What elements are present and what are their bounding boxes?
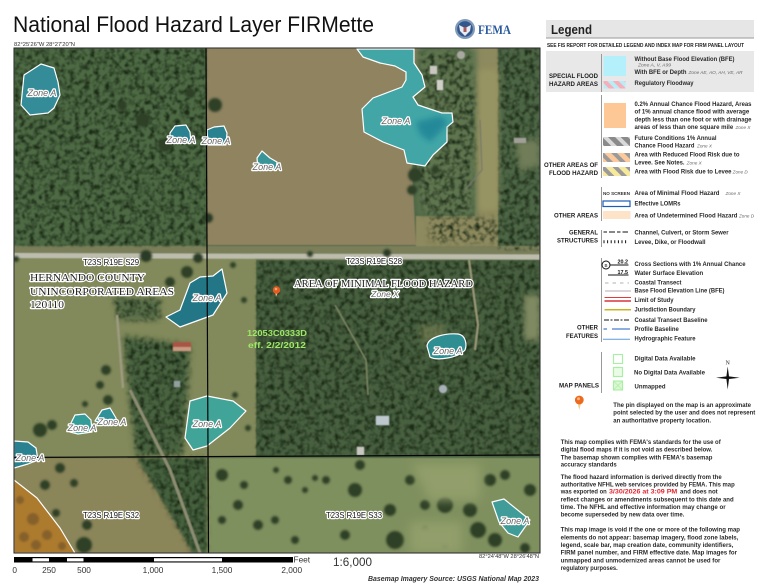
legend: other areas of flood hazard <box>544 95 752 178</box>
legend: special flood hazard areas: Without Base Flood Elevation (BFE) <box>634 57 734 63</box>
legend: general structures: Channel, Culvert, or Storm Sewer <box>634 230 729 236</box>
validity note: unmapped and unmodernized areas cannot be used for <box>561 558 721 564</box>
buildings <box>173 51 526 455</box>
pin note: The pin displayed on the map is an approximate <box>613 403 752 409</box>
legend: other features: B <box>604 263 608 268</box>
data source note: authoritative NFHL web services provided by FEMA. This map <box>561 482 735 488</box>
legend: other features: 20.2 <box>618 260 628 266</box>
map scale ratio: 1:6,000 <box>333 555 372 569</box>
legend: map panels: Unmapped <box>634 384 666 390</box>
legend: special flood hazard areas: Zone AE, AO, AH, VE, AR <box>687 70 742 75</box>
data source note: 3/30/2026 at 3:09 PM <box>609 490 677 496</box>
legend: other features: Jurisdiction Boundary <box>634 307 696 313</box>
land cover <box>14 48 540 553</box>
data source note: The flood hazard information is derived directly from the <box>561 475 722 481</box>
icon: legend pin <box>575 396 584 410</box>
legend: special flood hazard areas: With BFE or Depth <box>634 70 687 76</box>
section labels <box>83 257 403 520</box>
legend heading <box>546 20 754 38</box>
zone labels: Zone A <box>252 162 281 172</box>
section labels: T23S R19E S28 <box>346 257 403 266</box>
pin note: point selected by the user and does not represent <box>613 411 755 417</box>
tree canopy texture <box>14 48 540 553</box>
location pin <box>273 286 280 297</box>
data source note: reflect changes or amendments subsequent to this date and <box>561 497 734 503</box>
scale labels: 1,000 <box>143 565 164 575</box>
bottom-right coordinates: 82°24'48"W 28°26'48"N <box>479 554 539 560</box>
legend: other areas: Zone X <box>724 191 741 196</box>
data source note: and does not <box>680 490 718 496</box>
top-left coordinates: 82°25'26"W 28°27'20"N <box>14 42 75 48</box>
legend note: SEE FIS REPORT FOR DETAILED LEGEND AND INDEX MAP FOR FIRM PANEL LAYOUT <box>547 43 744 49</box>
data source note <box>560 475 735 519</box>
legend: other features: Water Surface Elevation <box>634 271 704 277</box>
FIRM panel label: 12053C0333D <box>247 328 307 338</box>
imagery source: Basemap Imagery Source: USGS National Map 2023 <box>368 574 540 583</box>
zone labels: Zone A <box>192 419 221 429</box>
legend: other areas of flood hazard: Future Conditions 1% Annual <box>634 136 717 142</box>
legend: other areas: OTHER AREAS <box>554 213 598 219</box>
legend: other features: Hydrographic Feature <box>634 336 696 342</box>
panel: legend <box>544 20 755 572</box>
zone labels: Zone A <box>97 417 126 427</box>
basemap imagery <box>13 48 540 553</box>
legend: other features: Coastal Transect Baseline <box>634 318 708 324</box>
validity note: elements do not appear: basemap imagery, flood zone labels, <box>561 535 739 541</box>
legend: other features: FEATURES <box>566 334 598 340</box>
scattered trees <box>33 88 536 553</box>
icon: north arrow compass <box>716 360 740 390</box>
zone labels: Zone X <box>370 289 399 299</box>
legend: general structures <box>557 230 729 247</box>
legend: other features: Base Flood Elevation Line (BFE) <box>634 289 725 295</box>
section labels: T23S R19E S29 <box>83 258 140 267</box>
scale labels: 500 <box>77 565 91 575</box>
legend: other areas of flood hazard: Levee. See Notes. <box>634 160 685 166</box>
zone labels: Zone A <box>15 453 44 463</box>
legend: other areas of flood hazard: areas of less than one square mile <box>634 125 734 131</box>
legend: other areas: NO SCREEN <box>603 191 630 196</box>
legend: other areas of flood hazard: of 1% annual chance flood with average <box>634 110 750 116</box>
title: National Flood Hazard Layer FIRMette <box>13 12 374 37</box>
legend: map panels: No Digital Data Available <box>634 370 706 376</box>
legend: map panels <box>559 352 706 393</box>
compliance note: accuracy standards <box>561 463 617 469</box>
legend: other features: OTHER <box>577 326 599 332</box>
scale bar <box>12 554 311 575</box>
panel: aerial map <box>13 48 540 553</box>
legend: other areas of flood hazard: 0.2% Annual Chance Flood Hazard, Areas <box>634 102 752 108</box>
legend: map panels: Digital Data Available <box>634 357 696 363</box>
clearings and driveways <box>117 70 540 553</box>
validity note: This map image is void if the one or more of the following map <box>561 527 740 533</box>
legend: other areas of flood hazard: Zone X <box>696 144 712 149</box>
validity note: FIRM panel number, and FIRM effective date. Map images for <box>561 551 738 557</box>
legend: other features <box>566 258 746 342</box>
zone A flood polygons <box>14 49 530 537</box>
legend: special flood hazard areas: SPECIAL FLOOD <box>549 74 599 80</box>
community label: UNINCORPORATED AREAS <box>30 286 174 298</box>
legend: other areas of flood hazard: Zone X <box>686 160 702 165</box>
zone labels: Zone A <box>166 135 195 145</box>
legend: other areas <box>554 187 754 221</box>
legend: other areas of flood hazard: depth less than one foot or with drainage <box>634 117 752 123</box>
community label: HERNANDO COUNTY <box>30 272 145 284</box>
orange 0.2 percent flood zone <box>14 480 75 553</box>
legend: general structures: GENERAL <box>569 230 598 236</box>
legend: other areas of flood hazard: Zone D <box>732 170 748 175</box>
zone labels: Zone A <box>192 293 221 303</box>
legend: other areas of flood hazard: Chance Flood Hazard <box>634 144 695 150</box>
section labels: T23S R19E S33 <box>326 511 383 520</box>
panel and section boundary lines <box>14 48 540 553</box>
compliance note: digital flood maps if it is not void as described below. <box>561 447 713 453</box>
data source note: was exported on <box>560 490 607 496</box>
legend: general structures: STRUCTURES <box>557 239 598 245</box>
zone labels <box>15 88 529 526</box>
legend: other features: Coastal Transect <box>634 280 682 286</box>
legend: other areas: Area of Undetermined Flood Hazard <box>634 214 738 220</box>
legend: other areas of flood hazard: Area with Flood Risk due to Levee <box>634 170 732 176</box>
validity note <box>561 527 740 572</box>
FEMA logo: FEMA <box>478 22 512 37</box>
community label: 120110 <box>30 299 65 311</box>
legend: other areas of flood hazard: Area with Reduced Flood Risk due to <box>634 153 740 159</box>
legend: other features: Profile Baseline <box>634 327 679 333</box>
FIRM panel label <box>248 330 307 348</box>
validity note: regulatory purposes. <box>561 566 618 572</box>
zone labels: Zone A <box>381 116 410 126</box>
zone labels: Zone A <box>500 516 529 526</box>
legend: special flood hazard areas: Zone A, V, A99 <box>637 62 672 68</box>
legend: general structures: Levee, Dike, or Floodwall <box>634 240 706 246</box>
legend: other areas: Effective LOMRs <box>634 202 681 208</box>
compliance note: This map complies with FEMA's standards for the use of <box>561 440 722 446</box>
zone labels: Zone A <box>433 346 462 356</box>
pin note: an authoritative property location. <box>613 418 711 424</box>
data source note: time. The NFHL and effective information may change or <box>561 505 726 511</box>
legend: other features: Limit of Study <box>634 298 674 304</box>
zone labels: Zone A <box>27 88 56 98</box>
section labels: T23S R19E S32 <box>83 511 140 520</box>
legend: other areas of flood hazard: OTHER AREAS OF <box>544 163 598 169</box>
scale labels: Feet <box>294 554 311 564</box>
icon: north arrow compass: N <box>726 360 731 366</box>
scale labels: 0 <box>12 565 17 575</box>
compliance note <box>561 440 722 469</box>
community label <box>30 272 174 311</box>
legend: special flood hazard areas: Regulatory Floodway <box>634 81 694 87</box>
legend: special flood hazard areas: HAZARD AREAS <box>549 82 598 88</box>
legend: map panels: MAP PANELS <box>559 383 599 389</box>
scale labels: 250 <box>42 565 56 575</box>
scale labels: 1,500 <box>212 565 233 575</box>
legend: special flood hazard areas <box>546 51 754 92</box>
road-side tree shadows <box>13 213 391 263</box>
legend: other areas: Area of Minimal Flood Hazard <box>634 191 720 197</box>
legend: other features: 17.5 <box>618 270 628 276</box>
pin note <box>613 403 755 424</box>
legend: other areas: Zone D <box>738 214 754 219</box>
zone labels: Zone A <box>67 423 96 433</box>
legend: other areas of flood hazard: FLOOD HAZARD <box>549 171 599 177</box>
compliance note: The basemap shown complies with FEMA's basemap <box>561 456 713 462</box>
map frame <box>14 48 540 553</box>
legend: other areas of flood hazard: Zone X <box>734 125 751 130</box>
FEMA logo <box>455 19 512 39</box>
scale labels <box>12 554 311 575</box>
flood hazard label: AREA OF MINIMAL FLOOD HAZARD <box>294 278 473 290</box>
zone labels: Zone A <box>201 136 230 146</box>
legend heading: Legend <box>551 23 592 37</box>
validity note: legend, scale bar, map creation date, community identifiers, <box>561 543 734 549</box>
scale labels: 2,000 <box>281 565 302 575</box>
data source note: become superseded by new data over time. <box>561 513 685 519</box>
FIRM panel label: eff. 2/2/2012 <box>248 340 306 350</box>
road <box>14 256 540 257</box>
legend: other features: Cross Sections with 1% Annual Chance <box>634 262 746 268</box>
